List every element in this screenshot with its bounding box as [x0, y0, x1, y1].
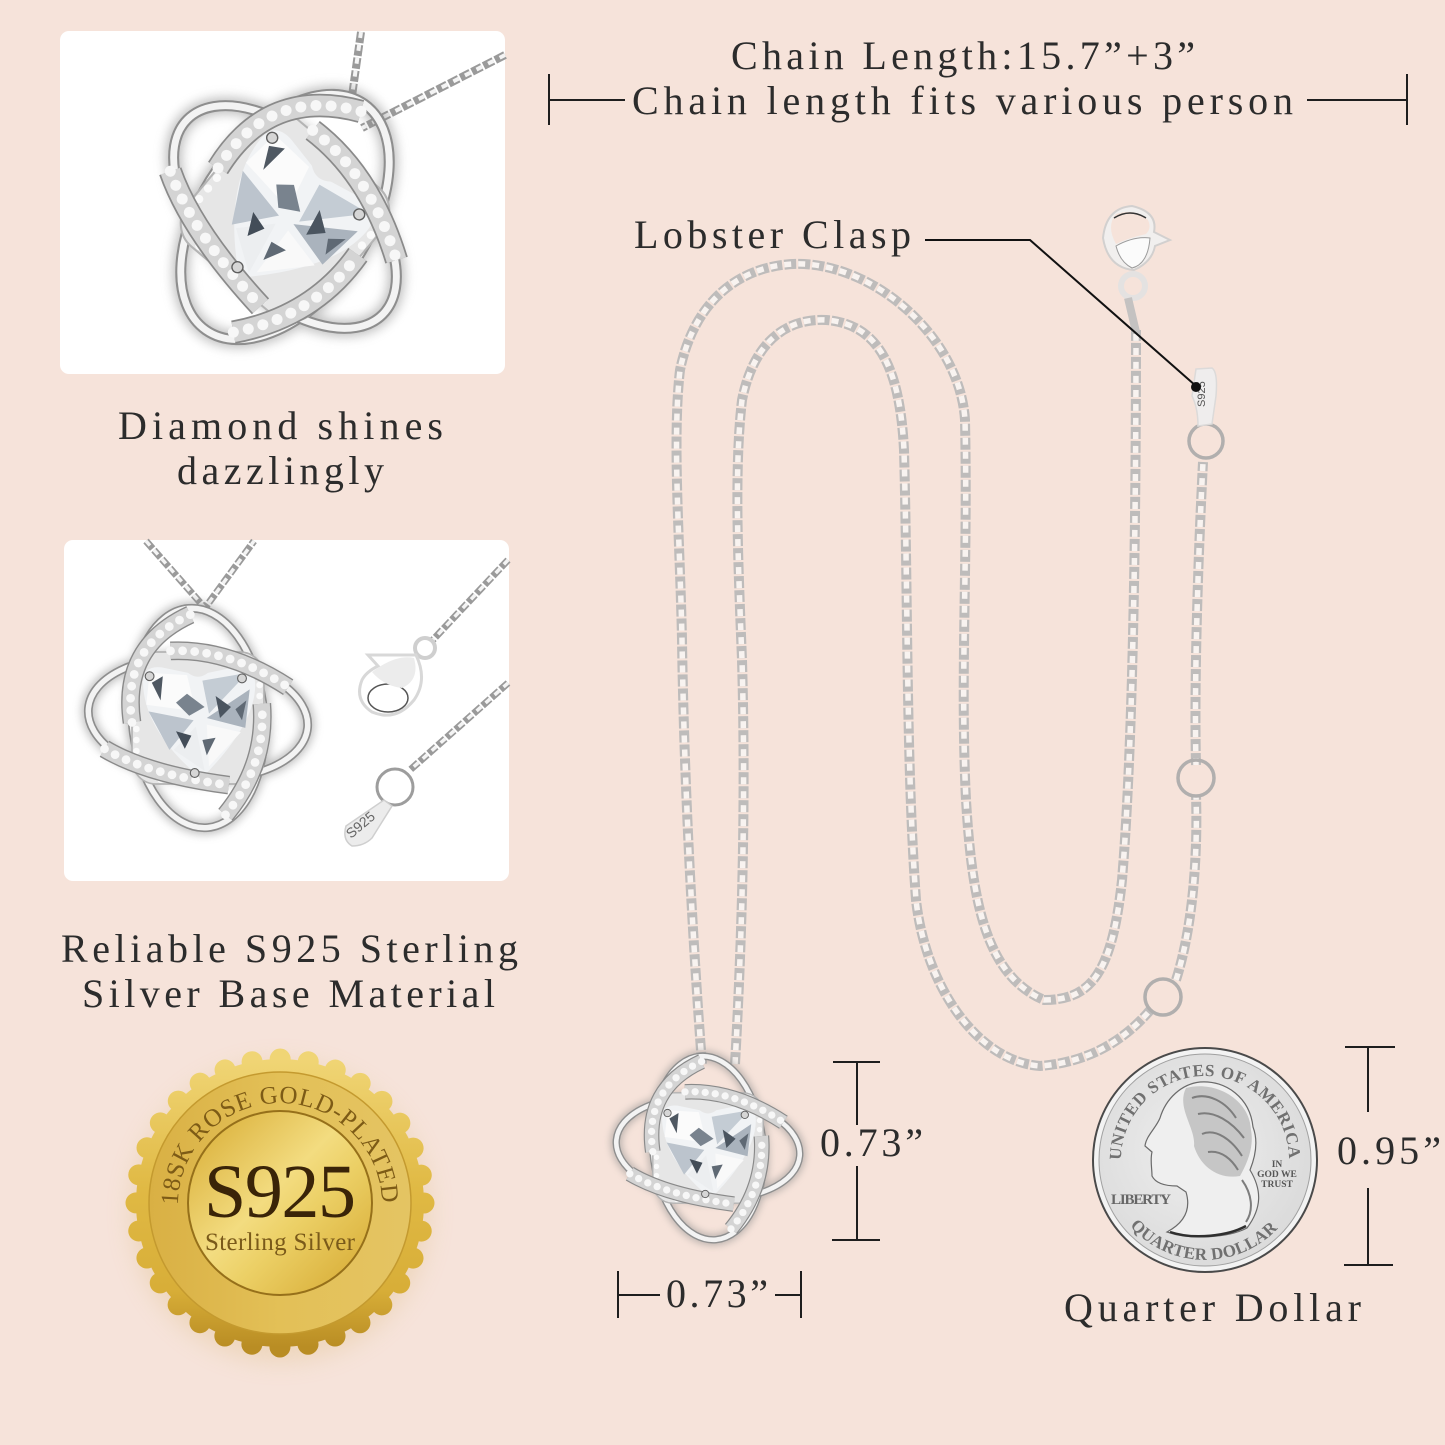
coin motto: IN — [1272, 1160, 1282, 1170]
caption: reliable S925: Silver Base Material — [82, 971, 495, 1016]
seal ring text: 18SK ROSE GOLD-PLATED — [162, 1086, 398, 1203]
heading: chain length — [632, 33, 1293, 123]
dimension: coin height: 0.95” — [1337, 1128, 1441, 1173]
icon: pendant actual size — [612, 1052, 804, 1244]
seal main text: S925 — [204, 1150, 356, 1234]
heading: chain length: Chain Length:15.7”+3” — [731, 33, 1195, 78]
coin liberty: LIBERTY — [1111, 1192, 1171, 1208]
dimension: pendant height: 0.73” — [820, 1120, 923, 1165]
dimension: pendant width — [618, 1271, 801, 1318]
coin motto: TRUST — [1261, 1180, 1293, 1190]
icon: gold S925 seal — [124, 1048, 436, 1368]
caption: reliable S925: Reliable S925 Sterling — [61, 926, 518, 971]
icon: S925 tag — [1192, 368, 1216, 426]
icon: pendant large — [82, 14, 488, 420]
dimension bracket: chain length — [549, 74, 1407, 125]
coin motto — [1257, 1160, 1297, 1190]
leader line: lobster clasp — [925, 240, 1201, 392]
coin bottom legend: QUARTER DOLLAR — [1132, 1220, 1278, 1260]
seal sub text: Sterling Silver — [205, 1229, 356, 1256]
caption: diamond shines — [118, 403, 443, 493]
icon: lobster clasp — [1103, 206, 1170, 332]
icon: S925 tag: S925 — [1196, 381, 1208, 407]
coin top legend: UNITED STATES OF AMERICA — [1110, 1064, 1300, 1159]
icon: quarter dollar coin — [1092, 1047, 1318, 1273]
caption: reliable S925 — [61, 926, 518, 1016]
coin motto: GOD WE — [1257, 1170, 1297, 1180]
icon: necklace chain strands — [352, 32, 505, 128]
icon: chain strands and clasp parts — [146, 541, 508, 846]
washington profile — [1145, 1082, 1259, 1237]
extender rings — [1145, 424, 1223, 1015]
dimension: pendant height — [820, 1062, 923, 1240]
dimension: coin height — [1337, 1047, 1441, 1265]
tag text: S925 — [343, 808, 378, 841]
icon: pendant — [83, 603, 313, 833]
heading: chain length: Chain length fits various person — [632, 78, 1293, 123]
dimension: pendant width: 0.73” — [666, 1271, 768, 1316]
caption: diamond shines: Diamond shines — [118, 403, 443, 448]
caption: quarter dollar: Quarter Dollar — [1064, 1285, 1361, 1330]
panel: sterling silver photo — [64, 540, 509, 881]
necklace chain — [677, 264, 1223, 1066]
panel: diamond close-up photo — [60, 14, 505, 420]
label: lobster clasp: Lobster Clasp — [634, 212, 911, 257]
caption: diamond shines: dazzlingly — [177, 448, 384, 493]
